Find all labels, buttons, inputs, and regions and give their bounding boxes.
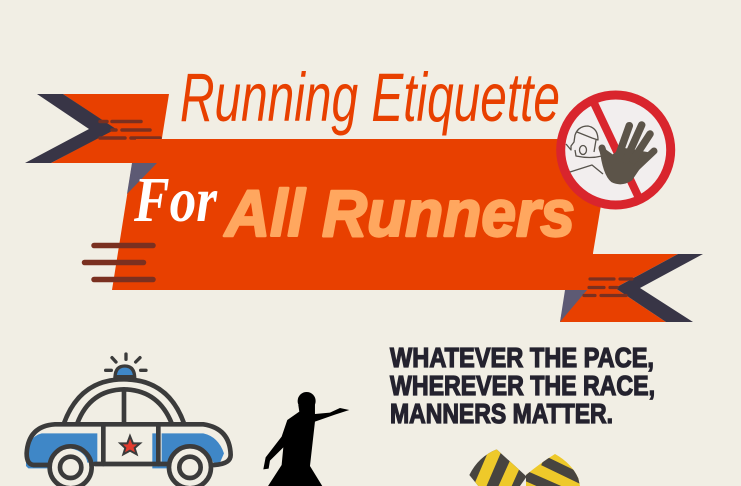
siren rays xyxy=(106,354,146,370)
icon: no entry sign with hand xyxy=(561,95,671,205)
infographic canvas xyxy=(24,71,703,486)
car star xyxy=(120,436,140,454)
upper-left ribbon xyxy=(25,94,169,163)
lower ribbon fold xyxy=(560,290,587,322)
subtitle: For: For xyxy=(133,164,218,235)
tagline xyxy=(390,342,655,429)
lower ribbon tail xyxy=(560,254,678,322)
left cone xyxy=(470,449,526,486)
ribbon tail xyxy=(51,94,169,163)
speed dashes lower xyxy=(584,279,632,296)
speed dashes upper xyxy=(100,122,160,138)
car outline xyxy=(27,379,231,465)
speed dashes left xyxy=(84,246,153,280)
right cone xyxy=(526,454,580,486)
person outline xyxy=(566,126,603,174)
lower-right ribbon xyxy=(560,254,703,322)
tagline: WHEREVER THE RACE, xyxy=(390,370,655,401)
icon: police car xyxy=(26,354,231,486)
title: Running Etiquette: Running Etiquette xyxy=(180,59,560,136)
subtitle: All Runners: All Runners xyxy=(223,176,575,250)
car siren xyxy=(115,366,135,377)
runner silhouette xyxy=(263,392,349,486)
main ribbon band xyxy=(112,139,612,290)
prohibition slash xyxy=(594,103,638,196)
lower ribbon chevron xyxy=(615,254,703,322)
ribbon chevron xyxy=(25,94,116,163)
sign disc xyxy=(561,95,671,205)
striped cones xyxy=(470,449,580,486)
car blue panels xyxy=(26,433,224,468)
hand xyxy=(600,125,654,184)
ribbon fold xyxy=(127,163,157,194)
car wheels xyxy=(50,446,211,486)
tagline: MANNERS MATTER. xyxy=(390,398,613,429)
tagline: WHATEVER THE PACE, xyxy=(390,342,654,373)
